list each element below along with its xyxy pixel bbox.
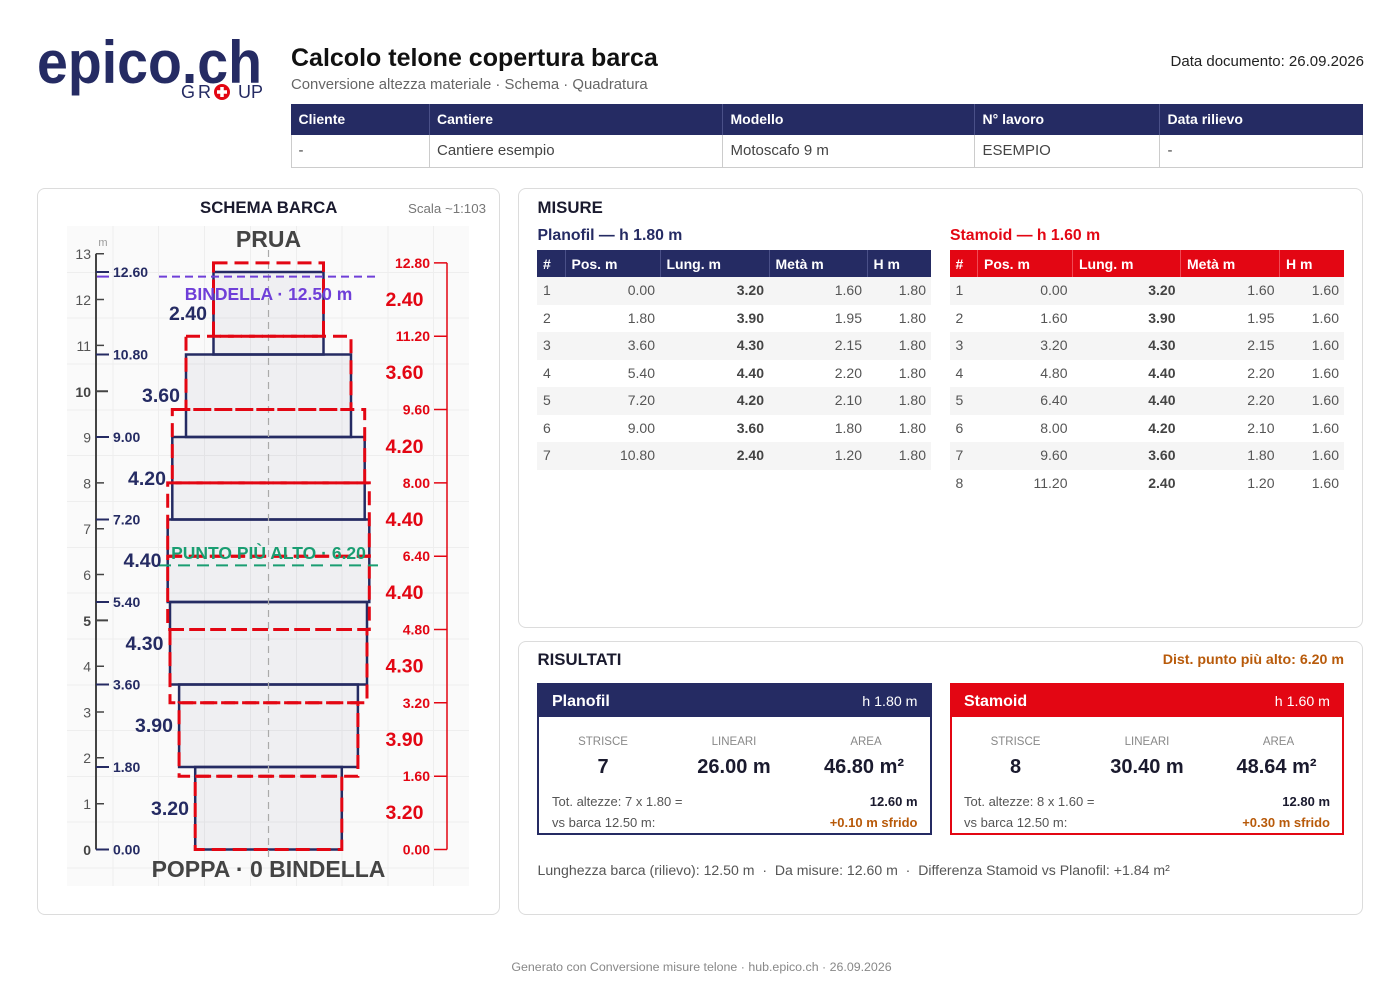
job info table: Motoscafo 9 m <box>730 142 829 159</box>
logo: epico.ch group: GR <box>181 82 211 102</box>
card: stamoid result: AREA <box>1263 736 1294 748</box>
planofil table: 5 <box>543 392 551 408</box>
planofil table heading: Planofil — h 1.80 m <box>538 227 682 244</box>
card: stamoid result: vs barca 12.50 m: <box>964 815 1067 830</box>
planofil position scale: 12.60 <box>113 264 148 280</box>
stamoid table: 1.95 <box>1247 310 1274 326</box>
stamoid table: 1 <box>956 282 963 298</box>
bow label: PRUA <box>236 226 301 252</box>
stamoid table: 2.20 <box>1247 365 1274 381</box>
stamoid table: H m <box>1286 256 1312 272</box>
risultati heading: RISULTATI <box>538 650 621 669</box>
panel: misure <box>518 188 1363 628</box>
stamoid table: 6.40 <box>1040 392 1068 408</box>
planofil position scale: 0.00 <box>113 842 140 858</box>
stamoid table: 4.80 <box>1040 365 1068 381</box>
planofil table: 3.90 <box>737 310 764 326</box>
stamoid table: Lung. m <box>1079 256 1133 272</box>
metre axis: 12 <box>75 292 91 308</box>
stamoid table: 4.40 <box>1148 392 1176 408</box>
stamoid table: 2.20 <box>1247 392 1274 408</box>
planofil length labels: 4.30 <box>126 633 164 655</box>
stamoid table: 2.15 <box>1247 337 1274 353</box>
job info table: Modello <box>730 111 783 127</box>
planofil table: 4.20 <box>737 392 764 408</box>
stamoid table: 8 <box>956 475 963 491</box>
metre axis: 8 <box>83 476 91 492</box>
stamoid table: 3 <box>956 337 963 353</box>
planofil table: 3.20 <box>737 282 764 298</box>
planofil table: 4.30 <box>737 337 764 353</box>
job info table: ESEMPIO <box>982 142 1051 159</box>
planofil table <box>537 250 931 470</box>
job info table: Data rilievo <box>1168 111 1243 127</box>
stamoid table: 2.10 <box>1247 420 1274 436</box>
stamoid table heading: Stamoid — h 1.60 m <box>950 227 1100 244</box>
card: stamoid result: STRISCE <box>991 736 1040 748</box>
stamoid position scale: 12.80 <box>395 255 430 271</box>
planofil table: 1.20 <box>835 447 862 463</box>
planofil table: 1.80 <box>899 337 926 353</box>
stamoid table: 2 <box>956 310 963 326</box>
card: stamoid result: 30.40 m <box>1110 756 1184 778</box>
planofil table: 3.60 <box>628 337 655 353</box>
metre axis: 1 <box>83 796 91 812</box>
planofil table: 2.20 <box>835 365 862 381</box>
stamoid table: 1.60 <box>1040 310 1068 326</box>
planofil length labels: 3.60 <box>142 385 180 407</box>
stamoid position scale: 3.20 <box>403 695 430 711</box>
stamoid length labels: 2.40 <box>386 289 424 311</box>
planofil table: 1.95 <box>835 310 862 326</box>
planofil table: 2.10 <box>835 392 862 408</box>
title: Calcolo telone copertura barca <box>291 44 658 72</box>
card: planofil result: STRISCE <box>578 736 628 748</box>
planofil position scale: 7.20 <box>113 512 140 528</box>
logo: epico.ch group: UP <box>238 82 263 102</box>
metre axis: m <box>98 237 108 249</box>
stamoid table: 4.40 <box>1148 365 1176 381</box>
stamoid table: 3.90 <box>1148 310 1176 326</box>
stamoid table: 3.60 <box>1148 447 1176 463</box>
card: planofil result: LINEARI <box>712 736 756 748</box>
stamoid table: 1.20 <box>1247 475 1274 491</box>
stamoid table: 2.40 <box>1148 475 1176 491</box>
planofil strips <box>168 272 369 850</box>
stamoid table: 8.00 <box>1040 420 1068 436</box>
planofil table: 1.80 <box>899 310 926 326</box>
stamoid table: 6 <box>956 420 963 436</box>
stamoid table: 3.20 <box>1148 282 1176 298</box>
stamoid length labels: 4.40 <box>386 582 424 604</box>
stamoid strips <box>168 263 369 849</box>
boat diagram <box>67 226 469 886</box>
planofil table: 1.80 <box>835 420 862 436</box>
planofil position scale: 10.80 <box>113 346 148 362</box>
metre axis: 5 <box>83 613 91 629</box>
planofil length labels: 3.90 <box>135 715 173 737</box>
metre axis: 6 <box>83 567 91 583</box>
job info table: - <box>298 142 304 159</box>
planofil length labels: 4.40 <box>124 550 162 572</box>
card: stamoid result: Tot. altezze: 8 x 1.60 = <box>964 794 1094 809</box>
metre axis: 4 <box>83 658 91 674</box>
card: planofil result: AREA <box>850 736 882 748</box>
stamoid length labels <box>386 289 424 824</box>
planofil table: 1.80 <box>899 420 926 436</box>
stamoid table: 1.60 <box>1247 282 1274 298</box>
stamoid table: 1.60 <box>1312 337 1339 353</box>
card: stamoid result: +0.30 m sfrido <box>1242 815 1330 830</box>
stamoid table: 4.20 <box>1148 420 1176 436</box>
card: planofil result: vs barca 12.50 m: <box>552 815 655 830</box>
card: planofil result: h 1.80 m <box>862 694 918 710</box>
metre axis: 3 <box>83 704 91 720</box>
planofil table: 1.80 <box>899 365 926 381</box>
panel: schema barca <box>37 188 500 915</box>
planofil table: 3.60 <box>737 420 764 436</box>
metre axis: 7 <box>83 521 91 537</box>
card: planofil result: 12.60 m <box>870 794 918 809</box>
planofil table: 7 <box>543 447 551 463</box>
planofil length labels: 2.40 <box>169 303 207 325</box>
card: planofil result <box>537 683 932 835</box>
planofil table: 1.80 <box>899 392 926 408</box>
card: stamoid result: 48.64 m² <box>1236 756 1317 778</box>
stamoid length labels: 3.20 <box>386 802 424 824</box>
stamoid table: 3.20 <box>1040 337 1068 353</box>
card: stamoid result: 12.80 m <box>1282 794 1330 809</box>
planofil length labels: 3.20 <box>151 798 189 820</box>
planofil table: 1 <box>543 282 551 298</box>
document date: Data documento: 26.09.2026 <box>1171 53 1364 70</box>
planofil table: 1.80 <box>899 447 926 463</box>
stamoid table: 1.60 <box>1312 365 1339 381</box>
stamoid position scale: 1.60 <box>403 768 430 784</box>
planofil position scale: 5.40 <box>113 594 140 610</box>
card: stamoid result: 8 <box>1010 756 1021 778</box>
bindella marker: BINDELLA · 12.50 m <box>185 284 352 304</box>
metre axis: 0 <box>83 842 91 858</box>
stamoid position scale: 9.60 <box>403 402 430 418</box>
planofil position scale: 1.80 <box>113 759 140 775</box>
planofil table: H m <box>874 256 900 272</box>
metre axis <box>75 237 108 858</box>
metre axis: 2 <box>83 750 91 766</box>
stamoid table: 1.80 <box>1247 447 1274 463</box>
planofil table: 6 <box>543 420 551 436</box>
card: planofil result: 7 <box>597 756 609 778</box>
metre axis: 9 <box>83 430 91 446</box>
stamoid length labels: 3.90 <box>386 729 424 751</box>
stamoid table: Metà m <box>1187 256 1235 272</box>
highest point distance: Dist. punto più alto: 6.20 m <box>1163 652 1344 668</box>
planofil table: 5.40 <box>628 365 655 381</box>
stamoid table: 1.60 <box>1312 420 1339 436</box>
stamoid length labels: 4.40 <box>386 509 424 531</box>
job info table: Cliente <box>298 111 345 127</box>
stamoid table: 1.60 <box>1312 475 1339 491</box>
stamoid table: 11.20 <box>1034 475 1068 491</box>
stamoid table: 1.60 <box>1312 447 1339 463</box>
planofil table: # <box>543 256 551 272</box>
planofil table: Pos. m <box>572 256 617 272</box>
stamoid table: 9.60 <box>1040 447 1068 463</box>
planofil length labels <box>124 303 207 820</box>
stamoid table: 4.30 <box>1148 337 1176 353</box>
card: planofil result: +0.10 m sfrido <box>830 815 918 830</box>
planofil table: 0.00 <box>628 282 655 298</box>
planofil table: 2.15 <box>835 337 862 353</box>
planofil table: 9.00 <box>628 420 655 436</box>
planofil position scale: 9.00 <box>113 429 140 445</box>
stamoid table: 0.00 <box>1040 282 1068 298</box>
stamoid position scale: 8.00 <box>403 475 430 491</box>
stamoid table: 1.60 <box>1312 282 1339 298</box>
metre axis: 10 <box>75 384 91 400</box>
planofil position scale: 3.60 <box>113 676 140 692</box>
metre axis: 13 <box>75 246 91 262</box>
planofil table: 1.80 <box>628 310 655 326</box>
job info table: Cantiere esempio <box>437 142 555 159</box>
logo: epico.ch group: epico.ch <box>37 29 262 96</box>
card: planofil result: 46.80 m² <box>824 756 904 778</box>
schema heading: SCHEMA BARCA <box>200 198 337 217</box>
card: stamoid result: h 1.60 m <box>1275 694 1330 710</box>
panel: risultati <box>518 641 1363 915</box>
highest point marker: PUNTO PIÙ ALTO · 6.20 <box>171 542 366 563</box>
stamoid length labels: 4.30 <box>386 656 424 678</box>
card: stamoid result: LINEARI <box>1125 736 1169 748</box>
footer: Generato con Conversione misure telone · hub.epico.ch · 26.09.2026 <box>511 960 892 974</box>
stamoid table: 5 <box>956 392 963 408</box>
planofil table: 7.20 <box>628 392 655 408</box>
card: planofil result: Planofil <box>552 693 610 710</box>
planofil table: 3 <box>543 337 551 353</box>
metre axis: 11 <box>76 338 91 354</box>
stamoid table: # <box>956 256 963 272</box>
planofil table: 4 <box>543 365 551 381</box>
job info table <box>291 104 1363 168</box>
card: stamoid result <box>950 683 1344 835</box>
card: planofil result: 26.00 m <box>697 756 771 778</box>
job info table: N° lavoro <box>982 111 1044 127</box>
stamoid position scale: 6.40 <box>403 548 430 564</box>
card: planofil result: Tot. altezze: 7 x 1.80 = <box>552 794 682 809</box>
scale note: Scala ~1:103 <box>408 201 486 216</box>
job info table: Cantiere <box>437 111 493 127</box>
subtitle: Conversione altezza materiale · Schema · Quadratura <box>291 77 648 93</box>
planofil table: 10.80 <box>620 447 655 463</box>
misure heading: MISURE <box>538 198 603 217</box>
stamoid length labels: 3.60 <box>386 362 424 384</box>
stamoid position scale <box>395 255 447 858</box>
planofil table: 2 <box>543 310 551 326</box>
stamoid length labels: 4.20 <box>386 436 424 458</box>
stern label: POPPA · 0 BINDELLA <box>152 856 385 882</box>
stamoid position scale: 11.20 <box>396 328 430 344</box>
stamoid table: 1.60 <box>1312 392 1339 408</box>
planofil table: 2.40 <box>737 447 764 463</box>
planofil table: Lung. m <box>666 256 721 272</box>
stamoid table: 1.60 <box>1312 310 1339 326</box>
planofil table: 4.40 <box>737 365 764 381</box>
planofil position scale <box>96 264 148 858</box>
stamoid position scale: 4.80 <box>403 622 430 638</box>
stamoid table: 4 <box>956 365 963 381</box>
summary line: Lunghezza barca (rilievo): 12.50 m · Da misure: 12.60 m · Differenza Stamoid vs Planofil: +1.84 m² <box>538 862 1170 878</box>
planofil table: 1.80 <box>899 282 926 298</box>
stamoid table: 7 <box>956 447 963 463</box>
planofil table: Metà m <box>776 256 824 272</box>
planofil length labels: 4.20 <box>128 468 166 490</box>
stamoid table: Pos. m <box>984 256 1030 272</box>
stamoid table <box>950 250 1344 491</box>
card: stamoid result: Stamoid <box>964 693 1027 710</box>
job info table: - <box>1168 142 1172 159</box>
planofil table: 1.60 <box>835 282 862 298</box>
centre line <box>268 250 270 860</box>
stamoid position scale: 0.00 <box>403 842 430 858</box>
